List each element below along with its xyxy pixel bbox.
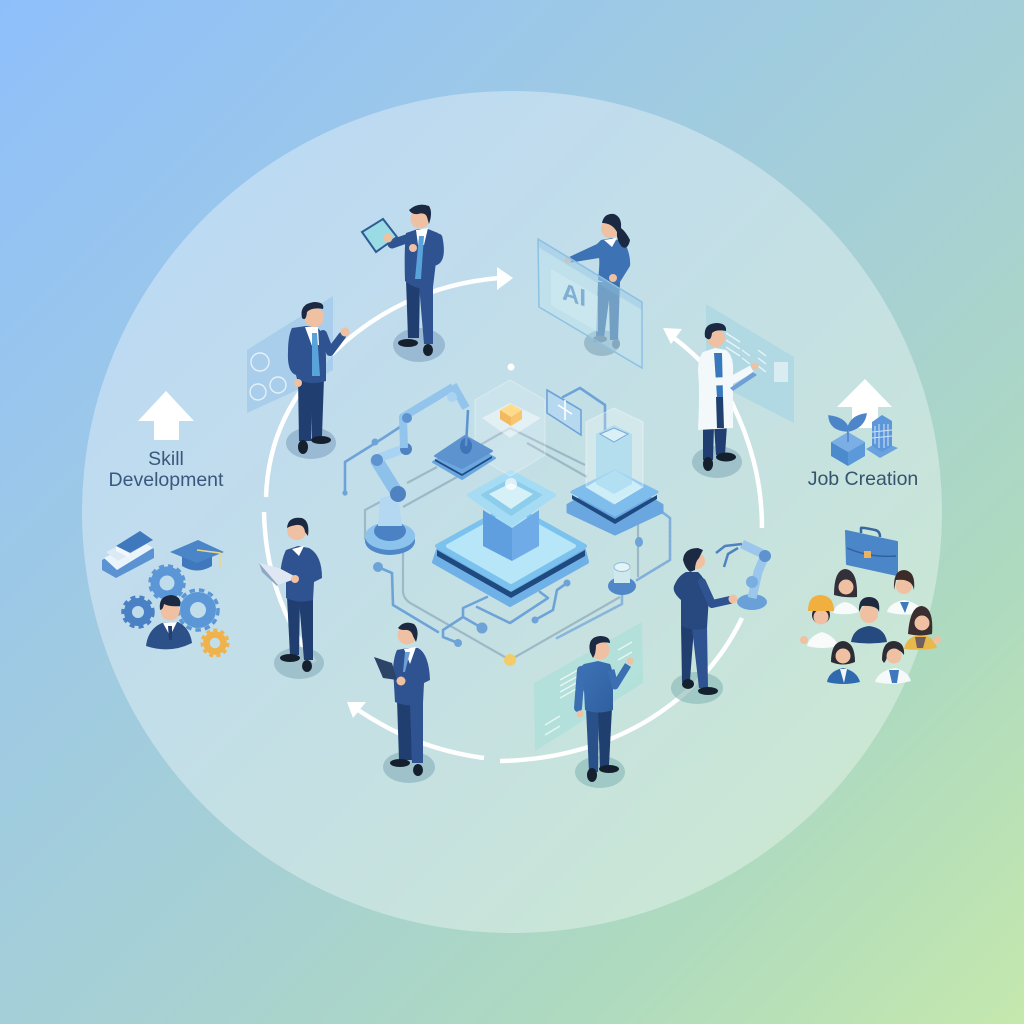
main platform — [434, 472, 587, 605]
label: skill development: Skill — [148, 448, 184, 470]
portrait: woman top left — [833, 569, 859, 614]
right platform with glass tower — [568, 408, 662, 534]
portrait: woman blue — [827, 641, 860, 684]
label: skill development: Development — [109, 469, 224, 491]
icon: sprout on cube — [829, 414, 866, 466]
arrow: bottom left arc — [347, 702, 484, 758]
arrow: up — [138, 391, 194, 440]
person: man with laptop — [259, 518, 324, 679]
central AI platform and circuit — [342, 364, 670, 666]
small robot platform — [433, 436, 495, 479]
circular flow arrows — [264, 267, 762, 761]
portrait: hardhat worker — [800, 595, 838, 648]
portrait: man top right — [887, 570, 924, 614]
panel: AI screen: AI — [562, 279, 586, 313]
robot arm: small gripper — [716, 544, 771, 610]
icon: office building — [866, 415, 898, 458]
arrow: left arc to top — [266, 267, 513, 497]
circuit lines — [342, 388, 670, 660]
icon: briefcase — [846, 528, 897, 575]
person: man with dark tablet — [374, 623, 435, 783]
icon: man bust — [146, 595, 192, 649]
block: job creation — [800, 379, 941, 684]
small floating panel — [547, 390, 581, 435]
panel: analytics — [534, 622, 643, 751]
person: engineer with robot arm — [671, 544, 771, 704]
block: skill development — [102, 391, 228, 656]
portrait: woman yellow cardigan — [904, 606, 941, 650]
portrait: woman white coat — [875, 641, 911, 684]
large translucent circle panel — [82, 91, 942, 933]
arrow: up — [837, 379, 892, 428]
person: scientist in lab coat — [692, 304, 794, 478]
person: man with data panel — [247, 296, 350, 459]
panel: research data — [706, 304, 794, 423]
icon: gears — [123, 566, 228, 656]
panel: AI screen — [538, 239, 642, 368]
person: tablet presenter — [362, 205, 445, 362]
small cylinder node — [608, 562, 636, 595]
panel: dashboard — [247, 296, 333, 413]
icon: books — [102, 531, 154, 578]
portrait: man center — [851, 597, 887, 644]
person: man in blue sweater — [534, 622, 643, 788]
yellow node — [504, 654, 516, 666]
glass cube with yellow core — [475, 364, 545, 476]
label: job creation: Job Creation — [808, 468, 918, 490]
person: woman with AI panel — [538, 214, 642, 368]
icon: graduation cap — [170, 540, 224, 570]
robot arm — [365, 385, 468, 555]
team portraits — [800, 569, 941, 684]
arrow: right arc to upper right — [663, 328, 762, 528]
arrow: left lower arc — [264, 512, 315, 662]
arrow: bottom right arc — [500, 618, 742, 761]
